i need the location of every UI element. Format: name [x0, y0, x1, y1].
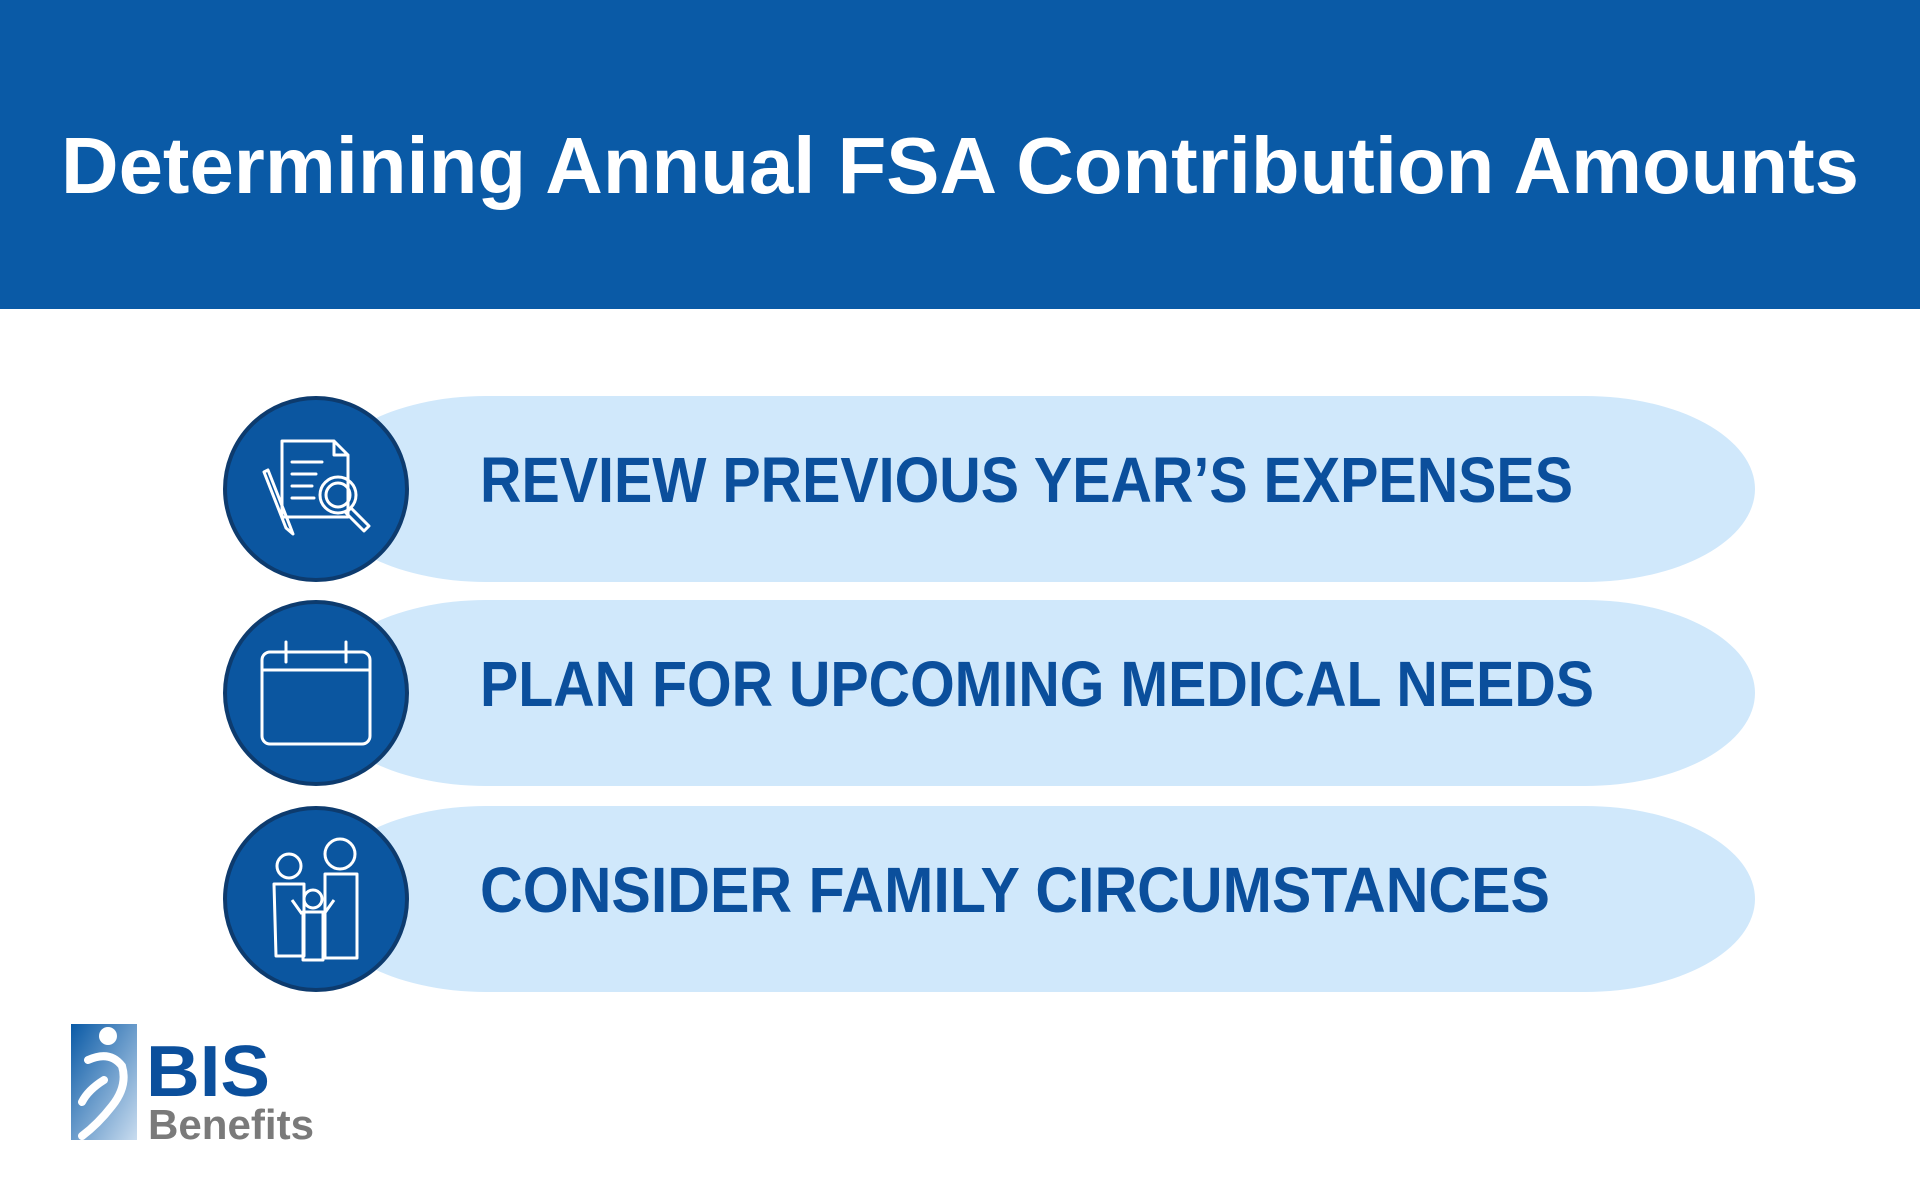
icon: calendar	[262, 642, 370, 744]
label: PLAN FOR UPCOMING MEDICAL NEEDS	[480, 648, 1594, 720]
header banner	[0, 0, 1920, 309]
row 3: family circumstances	[225, 806, 1755, 992]
row 1: review expenses	[225, 396, 1755, 582]
label: CONSIDER FAMILY CIRCUMSTANCES	[480, 854, 1550, 926]
icon: family	[274, 839, 357, 960]
logo: BIS Benefits: Benefits	[148, 1101, 314, 1148]
row 2: plan medical needs	[225, 600, 1755, 786]
icon: document with magnifier	[264, 441, 369, 534]
logo: BIS Benefits	[71, 1024, 314, 1148]
title: Determining Annual FSA Contribution Amounts	[61, 121, 1859, 210]
label: REVIEW PREVIOUS YEAR’S EXPENSES	[480, 444, 1573, 516]
logo: BIS Benefits: BIS	[146, 1032, 270, 1112]
